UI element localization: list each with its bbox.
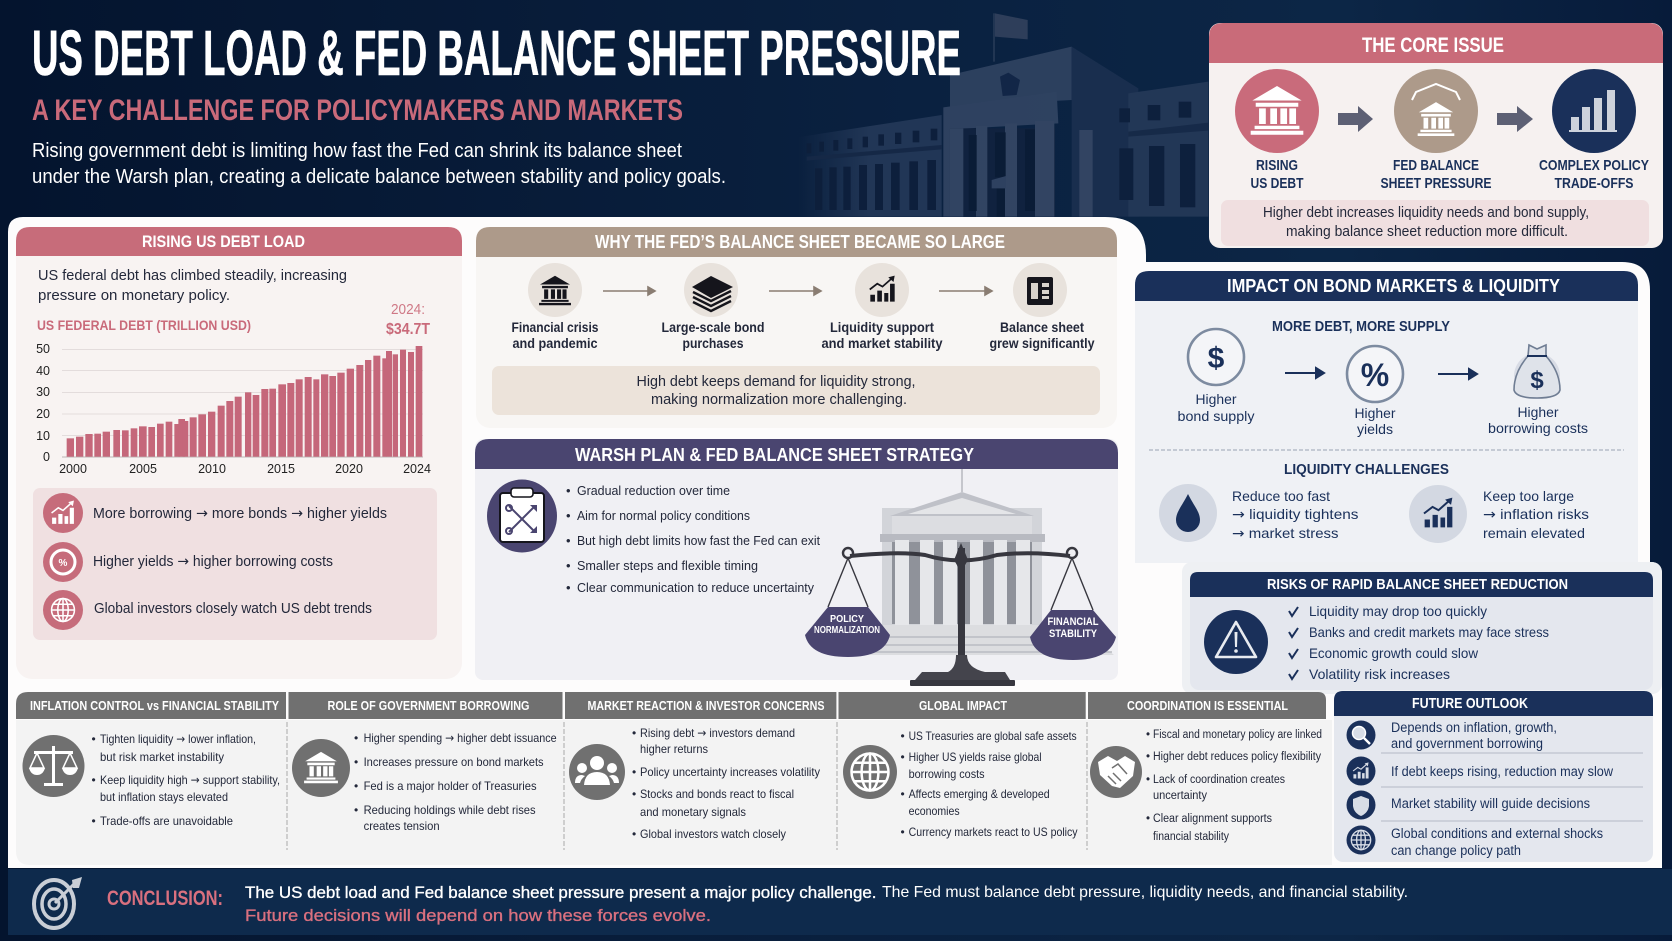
text: reduce too fast: → market stress <box>1232 525 1338 542</box>
card: global impact: • <box>900 787 905 801</box>
icon: balance sheet pressure <box>1394 69 1478 153</box>
text block: pressure on monetary policy. <box>38 287 230 304</box>
icon: water drop <box>1159 484 1217 542</box>
arrow <box>1285 368 1324 378</box>
card: inflation control: Keep liquidity high → support stability, <box>100 773 280 787</box>
icon: clipboard strategy <box>487 480 557 552</box>
icon: rising debt <box>1235 69 1319 153</box>
intro text: under the Warsh plan, creating a delicate balance between stability and policy goals. <box>32 165 726 188</box>
card: global impact <box>843 699 1078 839</box>
callout: making normalization more challenging. <box>651 392 907 408</box>
icon: bank <box>528 263 582 317</box>
checklist: Liquidity may drop too quickly <box>1309 603 1487 619</box>
illustration: Federal Reserve building <box>797 13 1208 217</box>
panel: risks of rapid reduction <box>1182 562 1662 694</box>
conclusion bar <box>8 869 1672 935</box>
card: global impact: Higher US yields raise global <box>909 750 1042 764</box>
card: government borrowing: • <box>354 755 358 769</box>
card: inflation control: Trade-offs are unavoidable <box>100 814 233 828</box>
panel: future outlook <box>1334 691 1653 862</box>
card: coordination: • <box>1146 774 1150 786</box>
label: rising us debt <box>1250 157 1304 192</box>
icon: percent dial <box>43 542 83 582</box>
scale pan: financial stability: STABILITY <box>1049 628 1098 640</box>
card: global impact: borrowing costs <box>909 767 985 781</box>
main white sheet <box>8 217 1662 868</box>
text: debt keeps rising: If debt keeps rising, reduction may slow <box>1391 764 1613 779</box>
checklist: Banks and credit markets may face stress <box>1309 624 1549 640</box>
callout: making balance sheet reduction more difficult. <box>1286 224 1568 240</box>
label: higher yields <box>1354 405 1396 437</box>
arrow <box>1438 369 1477 379</box>
text: market stability: Market stability will guide decisions <box>1391 796 1590 811</box>
bar chart <box>36 342 431 476</box>
bullet list <box>566 483 820 595</box>
text: reduce too fast: → liquidity tightens <box>1232 506 1358 523</box>
bar chart: 2000 <box>59 462 87 476</box>
icon: bank <box>292 739 350 797</box>
conclusion text: Future decisions will depend on how these forces evolve. <box>245 906 711 925</box>
icon: globe <box>843 745 897 799</box>
checklist <box>1289 603 1549 682</box>
subtitle: A KEY CHALLENGE FOR POLICYMAKERS AND MARKETS <box>32 94 683 127</box>
heading: RISKS OF RAPID BALANCE SHEET REDUCTION <box>1267 576 1568 593</box>
panel: warsh plan <box>475 439 1118 686</box>
icon: handshake <box>1090 746 1142 798</box>
bullet list: • <box>566 580 571 595</box>
card: government borrowing: Higher spending → higher debt issuance <box>364 731 557 745</box>
icon: investors <box>569 744 625 800</box>
card: inflation control: • <box>92 814 96 828</box>
scale pan: financial stability: FINANCIAL <box>1048 616 1099 628</box>
icon: globe <box>43 590 83 630</box>
card: global impact: Affects emerging & developed <box>909 787 1050 801</box>
card: coordination: Fiscal and monetary policy are linked <box>1153 729 1322 741</box>
scale pan: policy normalization: POLICY <box>830 613 864 625</box>
arrow <box>603 287 655 295</box>
card: global impact: • <box>900 750 905 764</box>
text: keep too large: remain elevated <box>1483 525 1585 541</box>
icon: dollar <box>1188 329 1244 385</box>
icon: borrowing chart <box>43 493 83 533</box>
conclusion text: The US debt load and Fed balance sheet pressure present a major policy challenge. <box>245 883 876 902</box>
card: inflation control: but risk market instability <box>100 750 224 764</box>
conclusion label: CONCLUSION: <box>107 887 223 910</box>
icon: ledger <box>1013 263 1067 317</box>
card: global impact: • <box>900 729 905 743</box>
label: complex policy trade-offs: TRADE-OFFS <box>1554 175 1634 192</box>
bar chart: 2005 <box>129 462 157 476</box>
icon: chart <box>1346 756 1376 786</box>
label: higher yields: Higher <box>1354 405 1396 421</box>
icon: percent: % <box>1361 357 1389 393</box>
callout: 2024 value: $34.7T <box>386 321 430 338</box>
label: financial crisis: Financial crisis <box>512 320 598 335</box>
scale pan: financial stability <box>1030 610 1116 660</box>
icon: stack of bonds <box>684 263 738 317</box>
card: global impact: US Treasuries are global safe assets <box>909 729 1077 743</box>
bar chart: 2020 <box>335 462 363 476</box>
subheading: more debt: MORE DEBT, MORE SUPPLY <box>1272 319 1450 335</box>
label: rising us debt: US DEBT <box>1250 175 1304 192</box>
card: inflation control <box>22 699 280 828</box>
card: inflation control: but inflation stays elevated <box>100 790 228 804</box>
card: market reaction: • <box>632 827 636 841</box>
icon: warning <box>1204 610 1268 674</box>
text: keep too large: → inflation risks <box>1483 506 1589 523</box>
card: inflation control: • <box>92 732 96 746</box>
callout: Higher debt increases liquidity needs and bond supply, <box>1263 205 1589 221</box>
card: market reaction: MARKET REACTION & INVESTOR CONCERNS <box>588 699 824 713</box>
text: depends on inflation: and government borrowing <box>1391 736 1543 751</box>
card: market reaction: • <box>632 787 636 801</box>
label: complex policy trade-offs <box>1539 157 1649 192</box>
label: fed balance sheet pressure: SHEET PRESSURE <box>1380 175 1492 192</box>
card: market reaction: and monetary signals <box>640 805 746 819</box>
label: higher bond supply: Higher <box>1196 391 1237 407</box>
card: coordination: COORDINATION IS ESSENTIAL <box>1127 699 1288 713</box>
bar chart: 10 <box>36 429 50 443</box>
text: depends on inflation: Depends on inflation, growth, <box>1391 720 1557 735</box>
icon: liquidity chart <box>855 263 909 317</box>
bar chart: 0 <box>43 450 50 464</box>
text block: US federal debt has climbed steadily, increasing <box>38 267 347 284</box>
text: global conditions: can change policy path <box>1391 843 1521 858</box>
icon: money bag: $ <box>1530 367 1544 394</box>
text: reduce too fast <box>1232 488 1358 542</box>
card: inflation control: INFLATION CONTROL vs FINANCIAL STABILITY <box>30 699 280 713</box>
card: global impact: economies <box>909 804 960 818</box>
text: depends on inflation <box>1391 720 1557 751</box>
bullet list: • <box>566 508 571 523</box>
icon: money bag <box>1514 345 1560 399</box>
label: higher yields: yields <box>1357 421 1393 437</box>
card: government borrowing: Reducing holdings while debt rises <box>364 803 536 817</box>
arrow <box>939 287 992 295</box>
card: global impact: GLOBAL IMPACT <box>919 699 1007 713</box>
icon: target <box>34 877 82 928</box>
text: global conditions: Global conditions and external shocks <box>1391 826 1603 841</box>
label: liquidity support: Liquidity support <box>830 320 934 335</box>
text: reduce too fast: Reduce too fast <box>1232 488 1330 504</box>
bar chart: 2024 <box>403 462 431 476</box>
heading: FUTURE OUTLOOK <box>1412 695 1528 712</box>
bar chart: 2010 <box>198 462 226 476</box>
label: financial crisis: and pandemic <box>512 336 598 351</box>
card: inflation control: Tighten liquidity → lower inflation, <box>100 732 256 746</box>
callout: High debt keeps demand for liquidity strong, <box>636 374 916 390</box>
icon: percent dial: % <box>59 558 68 569</box>
label: higher borrowing costs <box>1488 404 1588 436</box>
bullet list: • <box>566 533 571 548</box>
bullet list: • <box>566 483 571 498</box>
bar chart: 20 <box>36 407 50 421</box>
checklist: Volatility risk increases <box>1309 666 1450 682</box>
text: keep too large: Keep too large <box>1483 488 1574 504</box>
icon: scales <box>22 735 84 797</box>
icon: magnifier <box>1346 720 1376 750</box>
callout: debt effects <box>33 488 437 640</box>
card: coordination: uncertainty <box>1153 790 1207 802</box>
label: bond purchases: Large-scale bond <box>662 320 764 335</box>
heading: RISING US DEBT LOAD <box>142 233 305 251</box>
heading: WHY THE FED’S BALANCE SHEET BECAME SO LARGE <box>595 231 1005 252</box>
chart title: US FEDERAL DEBT (TRILLION USD) <box>37 317 251 333</box>
checklist: Economic growth could slow <box>1309 645 1479 661</box>
text: global investors: Global investors closely watch US debt trends <box>94 601 372 617</box>
heading: IMPACT ON BOND MARKETS & LIQUIDITY <box>1227 275 1561 296</box>
card: global impact: • <box>900 825 905 839</box>
label: fed balance sheet pressure <box>1380 157 1492 192</box>
bullet list: But high debt limits how fast the Fed can exit <box>577 533 820 548</box>
conclusion text <box>245 883 1408 925</box>
arrow <box>769 287 821 295</box>
card: market reaction: Rising debt → investors demand <box>640 726 795 740</box>
bullet list: Gradual reduction over time <box>577 483 730 498</box>
label: bond purchases: purchases <box>682 336 744 351</box>
panel: rising us debt load <box>16 227 462 679</box>
label: higher bond supply <box>1178 391 1254 424</box>
card: market reaction: higher returns <box>640 742 708 756</box>
card: coordination: • <box>1146 751 1150 763</box>
heading: WARSH PLAN & FED BALANCE SHEET STRATEGY <box>575 444 975 465</box>
card: market reaction: Stocks and bonds react to fiscal <box>640 787 794 801</box>
callout <box>1221 200 1649 246</box>
label: higher bond supply: bond supply <box>1178 408 1254 424</box>
card: market reaction <box>569 699 824 841</box>
text: keep too large <box>1483 488 1589 541</box>
bar chart: 2015 <box>267 462 295 476</box>
panel: why the balance sheet became large <box>476 227 1117 428</box>
label: higher borrowing costs: Higher <box>1518 404 1559 420</box>
label: bond purchases <box>662 320 764 351</box>
intro text: Rising government debt is limiting how fast the Fed can shrink its balance sheet <box>32 139 682 162</box>
arrow <box>1338 106 1373 132</box>
panel: bottom themes <box>16 692 1332 865</box>
card: government borrowing: creates tension <box>364 819 440 833</box>
bullet list: Smaller steps and flexible timing <box>577 558 758 573</box>
card: government borrowing: Increases pressure on bond markets <box>364 755 544 769</box>
conclusion text: The Fed must balance debt pressure, liquidity needs, and financial stability. <box>882 884 1408 901</box>
card: coordination: Clear alignment supports <box>1153 813 1272 825</box>
arrow <box>1497 106 1533 132</box>
label: complex policy trade-offs: COMPLEX POLICY <box>1539 157 1649 174</box>
bullet list: • <box>566 558 571 573</box>
card: government borrowing: Fed is a major holder of Treasuries <box>364 779 537 793</box>
label: liquidity support <box>822 320 943 351</box>
icon: shield <box>1346 790 1376 820</box>
title: US DEBT LOAD & FED BALANCE SHEET PRESSURE <box>32 17 961 89</box>
heading: the core issue: THE CORE ISSUE <box>1362 34 1504 57</box>
card: government borrowing <box>292 699 557 833</box>
label: rising us debt: RISING <box>1256 157 1298 174</box>
card: market reaction: • <box>632 765 636 779</box>
card: global impact: Currency markets react to US policy <box>909 825 1078 839</box>
callout <box>492 366 1100 415</box>
panel: core issue <box>1209 23 1663 248</box>
card: market reaction: Global investors watch closely <box>640 827 786 841</box>
card: inflation control: • <box>92 773 96 787</box>
card: coordination: Higher debt reduces policy flexibility <box>1153 751 1321 763</box>
panel: impact on bond markets <box>1135 271 1638 563</box>
icon: policy trade-offs <box>1552 69 1636 153</box>
card: government borrowing: ROLE OF GOVERNMENT BORROWING <box>328 699 530 713</box>
bar chart: 40 <box>36 364 50 378</box>
intro text <box>32 139 726 188</box>
bar chart: 50 <box>36 342 50 356</box>
scale pan: policy normalization <box>805 607 890 657</box>
label: liquidity support: and market stability <box>822 336 943 351</box>
subheading: liquidity challenges: LIQUIDITY CHALLENGES <box>1284 462 1449 478</box>
text: more borrowing: More borrowing → more bonds → higher yields <box>93 506 387 522</box>
card: coordination: financial stability <box>1153 831 1229 843</box>
label: higher borrowing costs: borrowing costs <box>1488 420 1588 436</box>
label: balance sheet grew <box>990 320 1095 351</box>
card: government borrowing: • <box>354 731 358 745</box>
label: financial crisis <box>512 320 598 351</box>
illustration: building and scale <box>805 469 1116 686</box>
text: higher yields: Higher yields → higher borrowing costs <box>93 554 333 570</box>
card: market reaction: • <box>632 726 636 740</box>
icon: percent <box>1347 346 1403 402</box>
icon: dollar: $ <box>1208 342 1225 375</box>
label: balance sheet grew: Balance sheet <box>1000 320 1084 335</box>
card: coordination: Lack of coordination creates <box>1153 774 1285 786</box>
card: coordination: • <box>1146 729 1150 741</box>
card: coordination: • <box>1146 813 1150 825</box>
bar chart: 30 <box>36 385 50 399</box>
card: government borrowing: • <box>354 779 358 793</box>
card: government borrowing: • <box>354 803 358 817</box>
text: global conditions <box>1391 826 1603 858</box>
icon: rising chart <box>1409 485 1467 543</box>
label: balance sheet grew: grew significantly <box>990 336 1095 351</box>
bullet list: Aim for normal policy conditions <box>577 508 750 523</box>
callout: 2024 value: 2024: <box>391 302 425 318</box>
callout: 2024 value <box>386 302 430 338</box>
bullet list: Clear communication to reduce uncertainty <box>577 580 814 595</box>
scale pan: policy normalization: NORMALIZATION <box>814 625 880 636</box>
label: fed balance sheet pressure: FED BALANCE <box>1393 157 1479 174</box>
card: coordination <box>1090 699 1322 843</box>
text block <box>38 267 347 304</box>
icon: globe <box>1346 826 1376 854</box>
card: market reaction: Policy uncertainty increases volatility <box>640 765 820 779</box>
